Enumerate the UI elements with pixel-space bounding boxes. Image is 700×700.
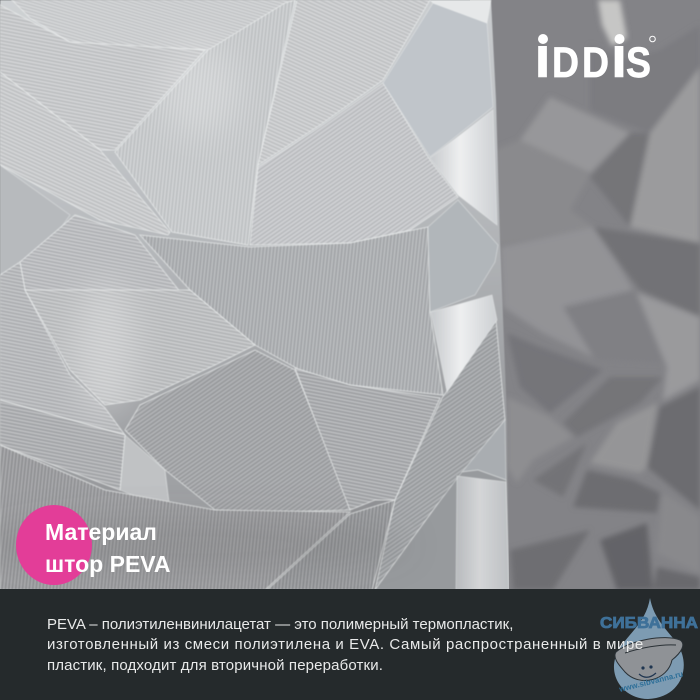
brand logo: iDDiS bbox=[538, 34, 656, 87]
back curtain, blurred bbox=[470, 0, 700, 600]
title: Материал штор PEVA: Материал bbox=[45, 519, 157, 545]
brand logo: iDDiS: i bbox=[534, 25, 551, 90]
description text bbox=[47, 616, 644, 674]
dark description band bbox=[0, 589, 700, 700]
description text: PEVA – полиэтиленвинилацетат — это полимерный термопластик, bbox=[47, 616, 513, 633]
description text: пластик, подходит для вторичной переработки. bbox=[47, 657, 383, 674]
front curtain bbox=[0, 0, 509, 590]
pink circle badge bbox=[16, 505, 92, 585]
title: Материал штор PEVA: штор PEVA bbox=[45, 551, 171, 577]
description text: изготовленный из смеси полиэтилена и EVA. Самый распространенный в мире bbox=[47, 636, 644, 653]
shading bbox=[75, 280, 135, 420]
brand logo: iDDiS: i bbox=[611, 25, 627, 90]
watermark: Sibvanna logo: СИБВАННА bbox=[600, 615, 698, 632]
brand logo: iDDiS: D bbox=[582, 39, 609, 87]
brand logo: iDDiS: S bbox=[626, 39, 651, 87]
title: Материал штор PEVA bbox=[45, 519, 171, 577]
brand logo: iDDiS: D bbox=[552, 39, 579, 87]
watermark: Sibvanna logo: www.sibvanna.ru bbox=[617, 669, 684, 694]
textured panes bbox=[0, 0, 509, 590]
